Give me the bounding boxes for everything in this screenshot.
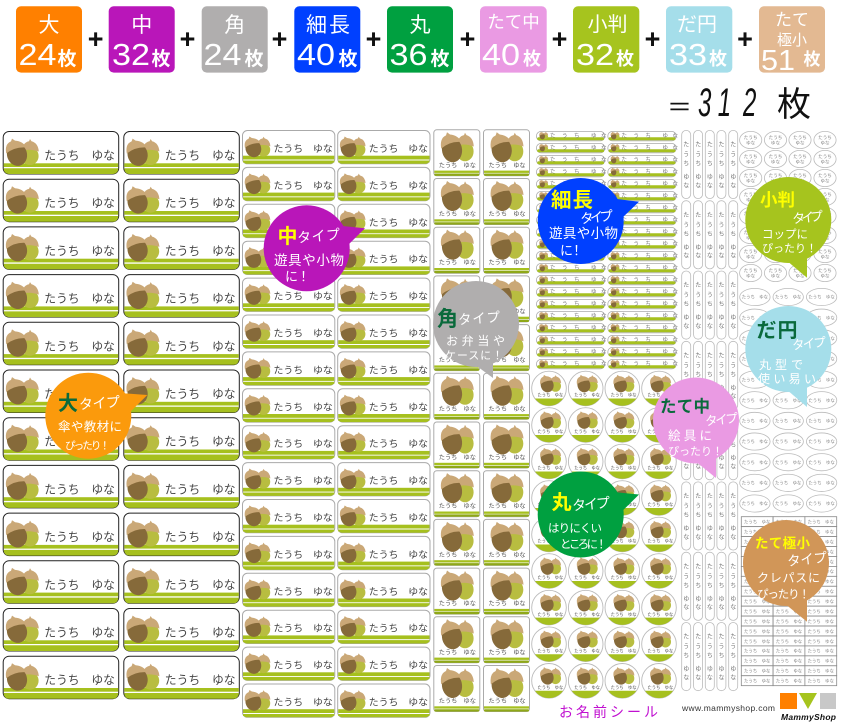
callout: 小判タイプ: タイプ — [791, 208, 824, 227]
callout: 小判タイプ — [745, 177, 831, 278]
tile: たて極小 51枚: 枚 — [804, 49, 820, 69]
plus signs: + — [552, 24, 567, 54]
sticker sheet: 中 medium labels — [242, 130, 430, 717]
logo: Mammy Shop — [780, 693, 836, 722]
sticker sheet: 角 square labels — [434, 130, 530, 712]
plus signs: + — [460, 24, 475, 54]
sticker sheet: 細長 slim labels — [536, 131, 678, 369]
callout: 丸タイプ — [538, 472, 639, 558]
tile: たて中 40枚: 40 — [482, 37, 520, 72]
tile: 角 24枚: 枚 — [244, 48, 264, 70]
callout: 大タイプ — [45, 373, 147, 459]
tile: 丸 36枚 — [387, 6, 453, 73]
tile: 大 24枚: 枚 — [57, 48, 77, 70]
callout: 角タイプ: お弁当や — [446, 333, 505, 348]
callout: 中タイプ: 遊具や小物 — [274, 253, 344, 268]
callout: 大タイプ: ぴったり！ — [65, 440, 110, 452]
sticker sheet: たて極小 tiny grid labels — [741, 517, 837, 686]
callout: 細長タイプ: 遊具や小物 — [549, 226, 618, 241]
callout: たて中タイプ: ぴったり！ — [668, 445, 723, 458]
callout: 角タイプ: ケースに！ — [445, 349, 503, 362]
sticker sheet: 丸 round labels — [532, 371, 676, 698]
tile: 角 24枚: 角 — [224, 14, 245, 37]
tile: 細長 40枚 — [294, 6, 360, 73]
plus signs: + — [737, 24, 753, 54]
plus signs: + — [88, 24, 104, 54]
callout: だ円タイプ: だ円 — [756, 320, 798, 342]
tile: 角 24枚 — [202, 6, 268, 73]
callout: だ円タイプ: 丸型で — [759, 358, 803, 372]
callout: たて極小タイプ: たて極小 — [755, 536, 810, 551]
tile: だ円 33枚: 33 — [669, 37, 707, 72]
callout: 中タイプ: に！ — [285, 269, 310, 284]
callout: 中タイプ — [264, 205, 365, 291]
callout: 細長タイプ: に！ — [560, 243, 583, 258]
callout: 丸タイプ: 丸 — [552, 491, 572, 514]
callout: だ円タイプ: タイプ — [791, 335, 827, 353]
tile: だ円 33枚: だ円 — [677, 14, 717, 36]
tile: 細長 40枚: 細長 — [306, 14, 350, 37]
sticker sheet: たて中 vertical labels — [682, 130, 738, 691]
tile: 中 32枚: 枚 — [151, 48, 171, 70]
callout: だ円タイプ — [745, 306, 831, 407]
tile: 細長 40枚: 枚 — [338, 48, 358, 70]
total: 312枚 — [667, 80, 811, 124]
callout: たて極小タイプ: ぴったり！ — [757, 588, 810, 601]
sticker sheet: だ円 oval labels — [740, 288, 837, 512]
callout: たて中タイプ: タイプ — [704, 411, 739, 429]
tile: 中 32枚: 32 — [112, 37, 150, 72]
callout: たて中タイプ: たて中 — [660, 397, 710, 416]
callout: たて中タイプ — [653, 378, 739, 478]
tile: 小判 32枚: 小判 — [588, 13, 628, 36]
callout: 丸タイプ: はりにくい — [548, 522, 602, 535]
plus signs: + — [645, 24, 660, 54]
callout: たて極小タイプ: タイプ — [786, 550, 828, 569]
tile: 中 32枚 — [109, 6, 175, 73]
callout: 細長タイプ — [538, 178, 639, 264]
callout: 丸タイプ: タイプ — [571, 494, 611, 514]
tile: 小判 32枚 — [573, 6, 639, 73]
plus signs — [88, 24, 753, 54]
footer title: お名前シール: お名前シール — [559, 704, 658, 720]
tile: たて極小 51枚: たて — [775, 10, 809, 30]
tile: 丸 36枚: 枚 — [430, 48, 450, 70]
callout: 中タイプ: タイプ — [296, 226, 341, 246]
footer url: www.mammyshop.com — [681, 703, 775, 713]
tile: 大 24枚: 24 — [18, 37, 56, 72]
callout: 細長タイプ: タイプ — [579, 208, 614, 227]
tile: たて中 40枚: 枚 — [523, 49, 541, 69]
callout: たて極小タイプ — [743, 520, 829, 622]
tile: たて極小 51枚: 51 — [761, 45, 795, 77]
callout: 大タイプ: タイプ — [78, 394, 121, 412]
tile: だ円 33枚: 枚 — [709, 49, 727, 69]
callout: 小判タイプ: 小判 — [760, 190, 795, 210]
total: 312枚: ＝ — [667, 94, 692, 122]
callout: 角タイプ: タイプ — [458, 310, 501, 327]
sticker sheet: 小判 small oval labels — [740, 131, 836, 282]
callout: たて中タイプ: 絵具に — [668, 429, 712, 443]
callout: 角タイプ: 角 — [437, 307, 458, 331]
tile: 丸 36枚: 36 — [390, 37, 428, 72]
tile: 丸 36枚: 丸 — [410, 14, 430, 37]
tile: 小判 32枚: 32 — [576, 37, 614, 72]
plus signs: + — [366, 24, 381, 54]
tile: たて中 40枚 — [480, 6, 547, 73]
callout: 小判タイプ: コップに — [762, 228, 808, 241]
total: 312枚: 312 — [698, 80, 756, 124]
callout: たて極小タイプ: クレパスに — [757, 571, 820, 585]
callout: 細長タイプ: 細長 — [551, 189, 593, 212]
total: 312枚: 枚 — [777, 86, 811, 124]
tile: 大 24枚 — [16, 6, 82, 73]
callout: 大タイプ: 大 — [58, 392, 78, 415]
tile: たて極小 51枚: 極小 — [777, 32, 807, 49]
callout: 中タイプ: 中 — [278, 225, 298, 248]
tile: たて極小 51枚 — [759, 6, 825, 77]
tile: 細長 40枚: 40 — [297, 37, 335, 72]
header: sheet counts — [16, 6, 825, 77]
tile: 大 24枚: 大 — [38, 14, 60, 37]
tile: 中 32枚: 中 — [131, 14, 152, 37]
sticker sheet: 大 large labels — [3, 132, 239, 699]
tile: たて中 40枚: たて中 — [487, 12, 540, 32]
callout: 丸タイプ: ところに！ — [560, 538, 607, 551]
plus signs: + — [272, 24, 287, 54]
callout: 小判タイプ: ぴったり！ — [762, 242, 817, 255]
tile: 角 24枚: 24 — [204, 37, 242, 72]
logo: Mammy Shop: MammyShop — [781, 712, 836, 722]
tile: 小判 32枚: 枚 — [616, 49, 634, 69]
callout: 角タイプ — [433, 281, 519, 378]
tile: だ円 33枚 — [666, 6, 732, 73]
plus signs: + — [180, 24, 195, 54]
callout: だ円タイプ: 使い易い — [758, 371, 816, 386]
callout: 大タイプ: 傘や教材に — [58, 419, 122, 434]
